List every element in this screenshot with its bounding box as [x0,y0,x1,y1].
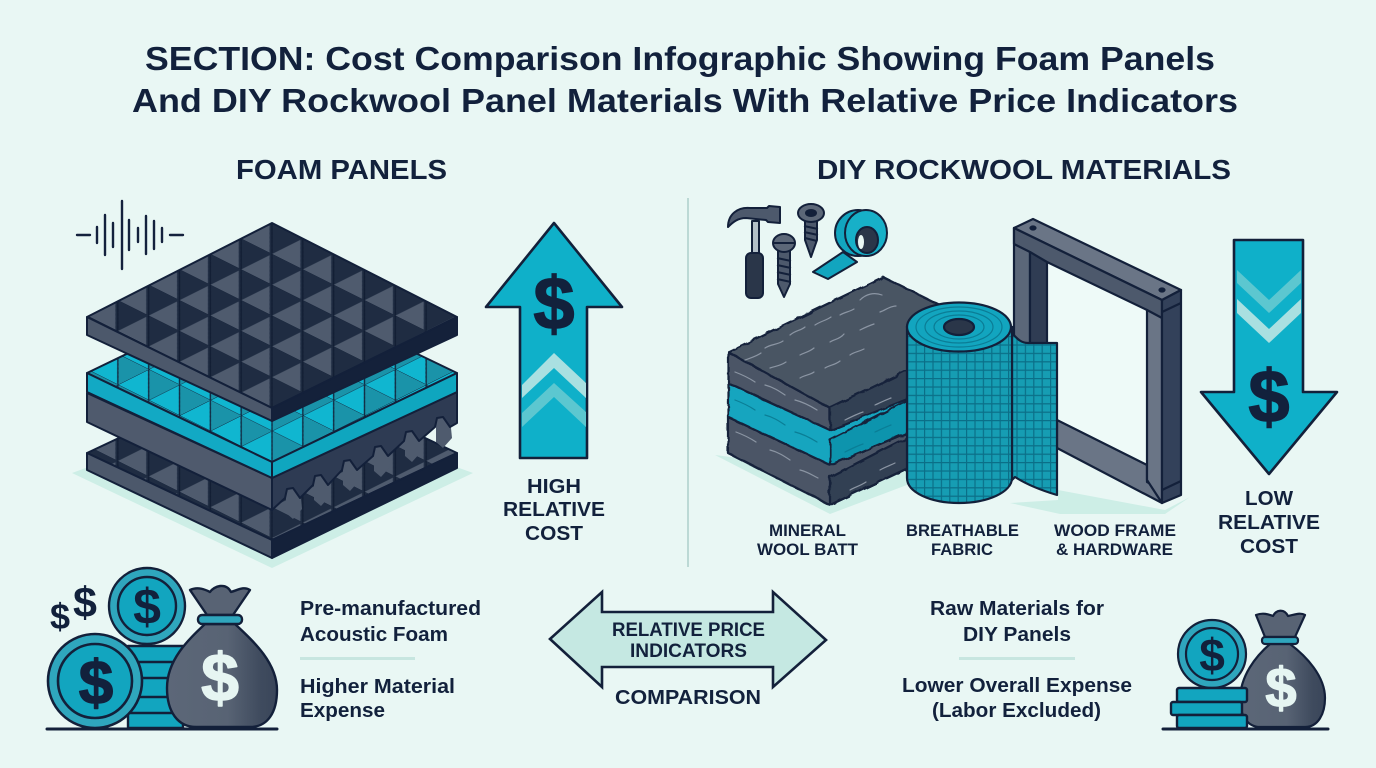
fabric roll [907,302,1012,503]
label: breathable fabric: FABRIC [931,540,993,559]
bottom batt [728,417,925,505]
label: high relative cost [503,475,605,545]
money bag [1240,611,1325,727]
title [132,40,1238,119]
frame right post [1147,310,1162,503]
heading: DIY rockwool materials: DIY ROCKWOOL MATERIALS [817,154,1231,185]
small dollar signs: $ [50,596,70,637]
foam teeth under band [286,418,452,519]
wood frame [1014,219,1181,503]
frame left post [1014,228,1030,345]
text: DIY cost notes: Raw Materials for [930,597,1104,620]
icon: tape roll [813,210,887,279]
label: low relative cost: RELATIVE [1218,511,1320,534]
double arrow: relative price indicators: COMPARISON [615,687,761,709]
text: foam cost notes: Acoustic Foam [300,623,448,646]
icon: hammer [728,206,780,298]
money bag [167,586,277,727]
text: foam cost notes: Pre-manufactured [300,597,481,620]
label: high relative cost: HIGH [527,475,581,498]
money bag: $ [201,640,239,716]
label: low relative cost [1218,487,1320,558]
small dollar signs: $ [73,579,97,627]
top foam panel [87,223,457,421]
floor shadow [72,400,473,568]
batt fibres [735,294,896,490]
label: low relative cost: LOW [1245,487,1294,510]
front coin [48,634,142,728]
double arrow: relative price indicators [550,592,826,709]
label: breathable fabric [906,521,1019,559]
frame bottom rail [1057,420,1162,503]
text: DIY cost notes: Lower Overall Expense [902,674,1132,697]
title: SECTION: Cost Comparison Infographic Showing Foam Panels [145,40,1215,77]
double arrow: relative price indicators: RELATIVE PRICE [612,620,765,641]
teal foam panel [87,284,457,478]
floor shadow: frame and roll [1010,490,1190,514]
frame top rail [1014,219,1181,300]
teal batt [728,383,925,465]
text: DIY cost notes: DIY Panels [963,623,1071,646]
frame window [1047,262,1147,463]
label: low relative cost: COST [1240,535,1298,558]
label: wood frame and hardware: & HARDWARE [1056,540,1173,559]
label: breathable fabric: BREATHABLE [906,521,1019,540]
label: high relative cost: RELATIVE [503,498,605,521]
small dollar signs [50,579,97,637]
label: wood frame and hardware [1054,521,1176,559]
coin [1178,620,1246,688]
coin: $ [1199,629,1225,681]
icon: small coins and money bag [1163,611,1328,729]
text: DIY cost notes: (Labor Excluded) [932,699,1101,722]
arrow: high relative cost [486,223,622,458]
label: mineral wool batt [757,521,859,559]
text: DIY cost notes [902,597,1132,722]
foam panel stack illustration [72,223,473,568]
title: And DIY Rockwool Panel Materials With Relative Price Indicators [132,82,1238,119]
fabric sheet [1012,333,1057,495]
grey middle band [87,392,457,510]
coin stack [1171,688,1247,728]
coin stack [128,646,183,728]
text: foam cost notes [300,597,481,722]
mineral wool batt stack [715,277,990,514]
icon: sound wave [77,201,183,269]
text: foam cost notes: Expense [300,699,385,722]
label: mineral wool batt: MINERAL [769,521,846,540]
arrow: high relative cost: $ [533,262,575,345]
top batt [728,352,830,430]
label: wood frame and hardware: WOOD FRAME [1054,521,1176,540]
arrow: low relative cost [1201,240,1337,474]
bottom foam panel [87,366,457,558]
top coin [109,568,185,644]
text: foam cost notes: Higher Material [300,675,455,698]
label: mineral wool batt: WOOL BATT [757,540,859,559]
heading: foam panels: FOAM PANELS [236,154,447,185]
icon: large coins and money bag [47,568,277,729]
money bag: $ [1265,656,1297,719]
top coin: $ [133,579,161,635]
double arrow: relative price indicators: INDICATORS [630,641,747,662]
front coin: $ [79,649,113,718]
arrow: low relative cost: $ [1248,355,1290,438]
label: high relative cost: COST [525,522,583,545]
icon: screws [773,204,824,297]
